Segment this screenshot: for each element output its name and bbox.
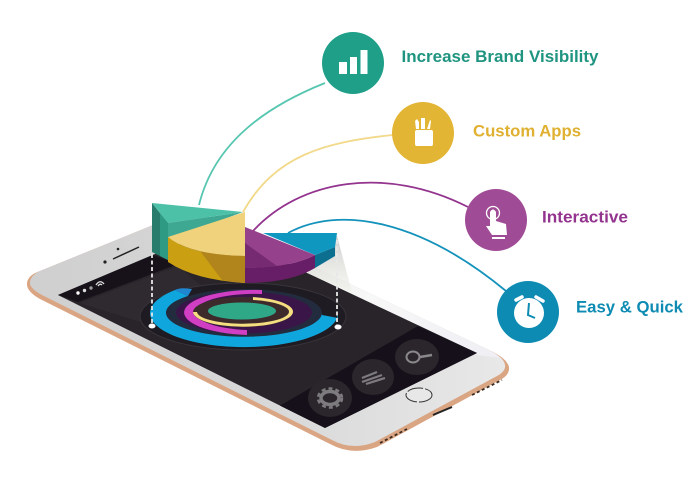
yellow ring — [193, 297, 293, 327]
phone rim — [27, 211, 509, 451]
purple slice — [245, 227, 315, 283]
phone body — [30, 211, 505, 446]
node: Increase Brand Visibility — [322, 32, 599, 94]
brown centre disk — [193, 297, 293, 327]
navy ring — [166, 289, 322, 337]
yellow slice — [168, 212, 245, 283]
status bar — [58, 255, 178, 302]
screen — [58, 229, 477, 428]
icon: alarm clock — [514, 297, 544, 328]
label: Custom Apps — [473, 122, 581, 140]
icon: pencil cup — [415, 118, 433, 146]
lighter screen fold — [80, 266, 230, 325]
icon: bar chart — [339, 50, 368, 74]
search button — [395, 339, 439, 375]
anchor dots — [148, 324, 342, 330]
gear button — [308, 379, 352, 417]
dashed drop lines — [152, 240, 337, 326]
blue ring start — [175, 288, 192, 296]
white upper-right edge — [240, 232, 500, 358]
teal slice — [152, 203, 243, 260]
chart base — [140, 283, 346, 350]
blue slice — [263, 233, 337, 268]
node: Interactive — [465, 189, 628, 251]
sensors — [103, 248, 119, 264]
purple inner disk — [176, 292, 312, 334]
speaker — [113, 247, 139, 259]
3D pie chart — [152, 203, 337, 283]
bottom control band — [280, 326, 477, 428]
connector: yellow — [243, 135, 393, 212]
magenta ring — [184, 290, 262, 335]
label: Increase Brand Visibility — [402, 47, 599, 66]
phone — [27, 211, 509, 451]
radial chart on screen — [140, 283, 346, 350]
connector: teal — [199, 83, 325, 205]
icon: pointing hand — [486, 206, 507, 239]
label: Easy & Quick — [576, 298, 684, 316]
blue outer ring — [150, 290, 338, 347]
green centre — [208, 302, 276, 320]
label: Interactive — [542, 208, 628, 226]
connector: purple — [253, 183, 468, 231]
antenna dashes — [380, 380, 502, 443]
glass projection — [307, 236, 352, 292]
home button — [406, 388, 432, 402]
node: Easy & Quick — [497, 281, 684, 343]
node: Custom Apps — [392, 102, 581, 164]
menu button — [352, 359, 394, 395]
connector: blue — [288, 220, 506, 291]
status icons — [76, 282, 104, 295]
